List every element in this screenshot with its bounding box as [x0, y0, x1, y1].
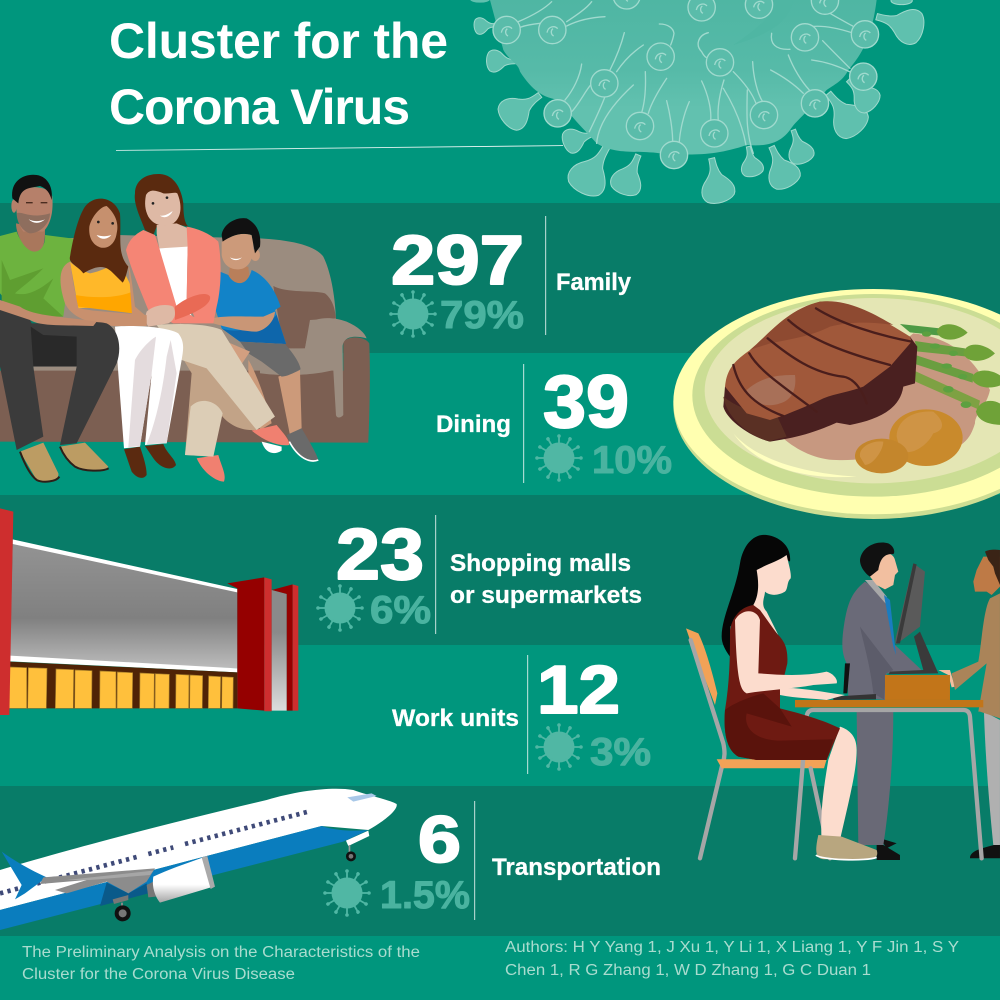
man upper body — [0, 175, 73, 317]
engine — [147, 856, 215, 903]
lower stripe — [0, 826, 368, 930]
asparagus — [900, 324, 1000, 425]
facade — [9, 539, 237, 708]
footer: source — [22, 944, 420, 983]
stat: transportation: 1.5% — [380, 874, 470, 917]
stat: family: Family — [556, 269, 632, 296]
mother — [126, 174, 289, 482]
footer: source: Cluster for the Corona Virus Disease — [22, 966, 295, 983]
cockpit window — [347, 793, 377, 802]
illustration: corona virus — [470, 0, 928, 206]
boy — [207, 218, 318, 461]
chair — [686, 628, 830, 858]
shop windows — [9, 667, 233, 708]
stat: dining: 10% — [592, 439, 672, 482]
footer: authors — [505, 939, 959, 979]
stat: transportation: Transportation — [492, 854, 661, 881]
tail fin — [2, 852, 47, 899]
stat: transportation: 6 — [418, 802, 461, 876]
title: Cluster for the — [109, 13, 448, 69]
stat: work units — [392, 652, 651, 774]
stat: dining: Dining — [436, 411, 511, 438]
icon: virus — [535, 434, 583, 482]
sauce — [783, 333, 990, 460]
title: Corona Virus — [109, 79, 410, 135]
man legs — [0, 300, 119, 482]
band: family — [0, 203, 1000, 353]
wing — [40, 868, 155, 906]
stat: dining: 39 — [543, 360, 629, 443]
stat: shopping: 23 — [336, 515, 424, 595]
standing man — [842, 542, 923, 860]
footer: authors: Authors: H Y Yang 1, J Xu 1, Y Li 1, X Liang 1, Y F Jin 1, S Y — [505, 939, 959, 956]
red pillars — [0, 508, 298, 715]
sofa — [0, 235, 370, 443]
stat: shopping: 6% — [370, 589, 431, 632]
plate — [673, 289, 1000, 519]
stat: work units: 3% — [590, 731, 651, 774]
stat: shopping — [316, 515, 642, 634]
potatoes — [855, 409, 963, 473]
icon: virus — [316, 584, 364, 632]
illustration: family on sofa — [0, 174, 370, 482]
windows — [0, 812, 308, 893]
stat: family: 297 — [391, 221, 524, 299]
steak — [723, 301, 917, 442]
band: transportation — [0, 786, 1000, 936]
nose landing gear — [346, 831, 369, 861]
stat: dining — [436, 360, 672, 483]
stat: shopping: or supermarkets — [450, 582, 642, 609]
desk — [795, 663, 983, 858]
icon: virus — [535, 723, 583, 771]
stat: family — [389, 216, 632, 338]
icon: virus — [323, 869, 371, 917]
footer: authors: Chen 1, R G Zhang 1, W D Zhang 1, G C Duan 1 — [505, 962, 871, 979]
illustration: shopping mall — [0, 508, 298, 715]
band: shopping — [0, 495, 1000, 645]
stat: family: 79% — [440, 294, 524, 337]
right man — [938, 550, 1000, 858]
illustration: airplane — [0, 789, 397, 930]
seated woman — [722, 535, 877, 860]
icon: virus — [389, 290, 437, 338]
title — [109, 13, 448, 135]
daughter — [60, 199, 183, 478]
stat: work units: 12 — [537, 652, 620, 728]
main landing gear — [113, 895, 131, 921]
fuselage — [0, 789, 397, 910]
stat: work units: Work units — [392, 705, 519, 732]
title underline — [116, 145, 563, 151]
illustration: steak plate — [673, 289, 1000, 519]
computer monitor — [888, 563, 938, 674]
illustration: office workers — [686, 535, 1000, 860]
stat: transportation — [323, 801, 661, 920]
footer: source: The Preliminary Analysis on the Characteristics of the — [22, 944, 420, 961]
stat: shopping: Shopping malls — [450, 550, 631, 577]
